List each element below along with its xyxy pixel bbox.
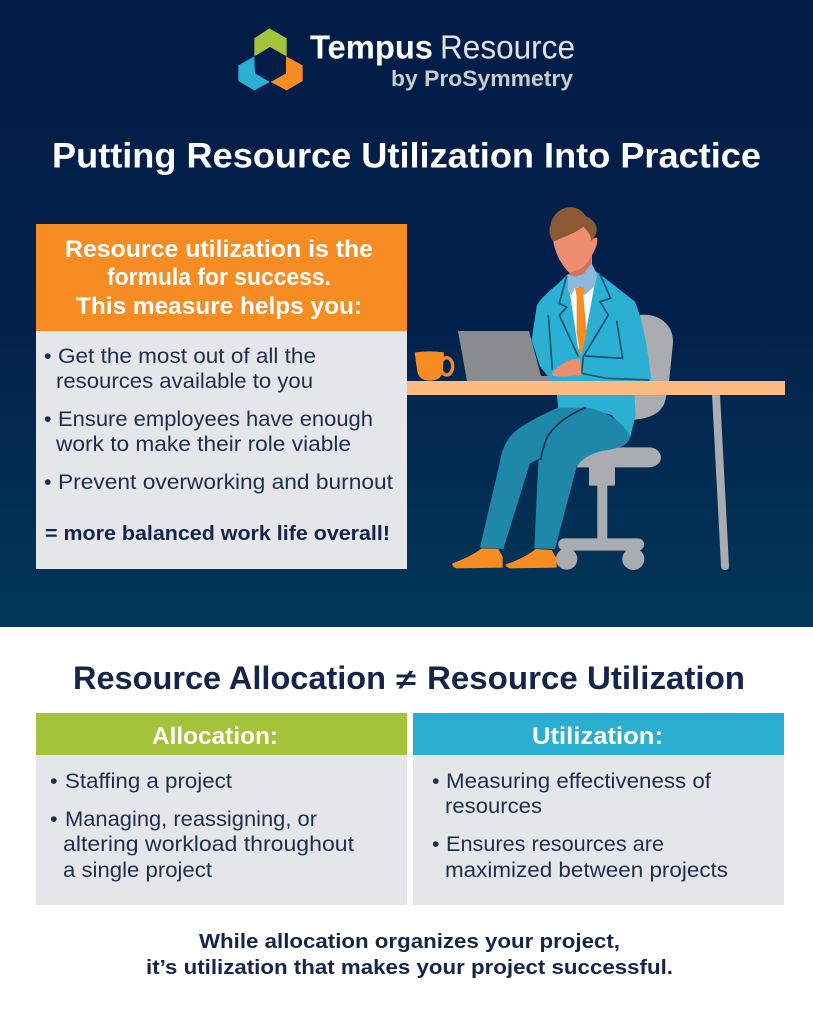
comparison heading: [73, 660, 745, 696]
comparison heading: Resource Utilization: [427, 660, 745, 696]
benefits list: •: [44, 344, 52, 368]
allocation list: Managing, reassigning, or: [65, 807, 317, 831]
allocation list: [50, 769, 354, 882]
panel: utilization: [413, 713, 784, 905]
closing statement: [146, 930, 673, 979]
trousers: [480, 407, 630, 549]
utilization list: Ensures resources are: [446, 832, 664, 856]
allocation list: a single project: [63, 858, 212, 882]
panel heading: Resource utilization is the: [65, 236, 373, 263]
utilization list: •: [432, 769, 440, 793]
panel: allocation: [36, 713, 407, 905]
benefits list: •: [44, 470, 52, 494]
jacket lines: [548, 273, 649, 380]
desk leg: [712, 394, 729, 570]
benefits list: Ensure employees have enough: [58, 407, 373, 431]
illustration: man working at desk: [407, 207, 785, 570]
shirt: [570, 277, 596, 350]
jacket: [532, 272, 652, 382]
allocation list: •: [50, 769, 58, 793]
icon: hexagon logo mark: [238, 28, 303, 90]
logo: Resource: [440, 28, 575, 66]
utilization list: maximized between projects: [445, 858, 728, 882]
logo byline: by ProSymmetry: [391, 66, 574, 91]
benefits list: work to make their role viable: [55, 432, 351, 456]
panel: resource utilization benefits: [36, 224, 407, 569]
jacket lower: [557, 393, 636, 438]
benefits list: •: [44, 407, 52, 431]
utilization list: Measuring effectiveness of: [446, 769, 711, 793]
panel body background: [36, 331, 407, 569]
logo wordmark: Tempus: [310, 28, 433, 66]
trouser seam: [541, 407, 586, 460]
tie: [575, 287, 587, 357]
logo: [238, 28, 575, 91]
allocation list: •: [50, 807, 58, 831]
utilization list: •: [432, 832, 440, 856]
top panel background: [0, 0, 813, 627]
neck and face: [553, 227, 597, 277]
hand: [552, 358, 582, 377]
panel: utilization: Utilization:: [532, 723, 663, 750]
allocation list: altering workload throughout: [63, 832, 354, 856]
benefits list: resources available to you: [56, 369, 313, 393]
allocation body: [36, 755, 407, 905]
collar: [568, 263, 597, 295]
comparison heading: Resource Allocation: [73, 660, 386, 696]
coffee cup: [415, 351, 453, 381]
title: Putting Resource Utilization Into Practice: [52, 136, 761, 176]
benefits list: Prevent overworking and burnout: [58, 470, 393, 494]
panel: allocation: Allocation:: [152, 723, 278, 750]
hair: [549, 207, 597, 242]
panel heading: [65, 236, 373, 320]
utilization body: [413, 755, 784, 905]
neck shadow: [568, 256, 591, 277]
closing statement: While allocation organizes your project,: [199, 930, 620, 953]
chair back: [630, 315, 673, 420]
utilization list: [432, 769, 728, 882]
benefits conclusion: = more balanced work life overall!: [45, 522, 390, 545]
chair seat and base: [556, 447, 661, 570]
panel heading: This measure helps you:: [76, 293, 362, 320]
panel header background: [36, 224, 407, 331]
benefits list: [44, 344, 393, 494]
upper body: [532, 207, 652, 382]
allocation header: [36, 713, 407, 755]
allocation list: Staffing a project: [65, 769, 232, 793]
laptop: [458, 331, 564, 381]
utilization list: resources: [445, 794, 542, 818]
utilization header: [413, 713, 784, 755]
desk top: [407, 381, 785, 395]
closing statement: it’s utilization that makes your project successful.: [146, 956, 673, 979]
shoes: [452, 548, 557, 568]
comparison heading: ≠: [396, 664, 416, 695]
panel heading: formula for success.: [107, 264, 331, 291]
benefits list: Get the most out of all the: [58, 344, 316, 368]
